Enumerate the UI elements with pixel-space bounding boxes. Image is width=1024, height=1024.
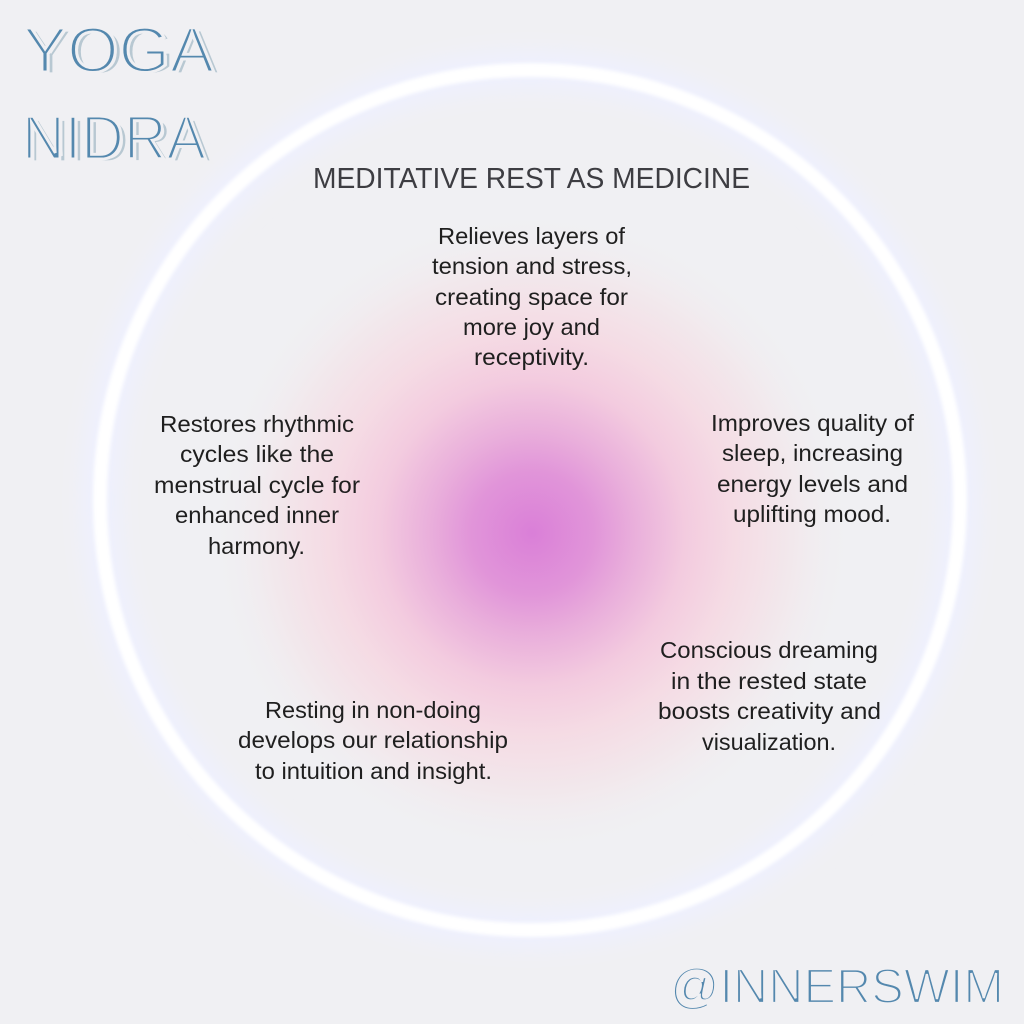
text block: tension and stress: receptivity. <box>474 344 589 370</box>
text block: quality of sleep <box>711 410 914 527</box>
title: Nidra: NIDRA <box>28 107 213 176</box>
text block: quality of sleep: uplifting mood. <box>733 501 891 527</box>
text block: tension and stress: tension and stress, <box>432 253 632 279</box>
text block: quality of sleep: Improves quality of <box>711 410 914 436</box>
text block: quality of sleep: sleep, increasing <box>722 440 903 466</box>
text block: non-doing: Resting in non-doing <box>265 697 481 723</box>
text block: conscious dreaming: Conscious dreaming <box>660 637 878 663</box>
text block: non-doing <box>238 697 508 784</box>
text block: tension and stress <box>432 223 632 370</box>
text block: quality of sleep: energy levels and <box>717 471 908 497</box>
text block: rhythmic cycles: harmony. <box>208 533 305 559</box>
text block: rhythmic cycles: enhanced inner <box>175 502 339 528</box>
text block: tension and stress: more joy and <box>463 314 600 340</box>
heading: MEDITATIVE REST AS MEDICINE <box>313 163 750 195</box>
text block: conscious dreaming <box>658 637 881 755</box>
central pink glow <box>207 208 857 858</box>
title: Yoga: YOGA <box>29 16 220 88</box>
title: Nidra: NIDRA <box>22 104 207 173</box>
text block: rhythmic cycles <box>154 411 360 559</box>
text block: rhythmic cycles: menstrual cycle for <box>154 472 360 498</box>
handle: @innerswim: @INNERSWIM <box>670 960 1004 1014</box>
text block: tension and stress: Relieves layers of <box>438 223 625 249</box>
text block: tension and stress: creating space for <box>435 284 628 310</box>
text block: rhythmic cycles: Restores rhythmic <box>160 411 354 437</box>
text block: conscious dreaming: in the rested state <box>671 668 867 694</box>
glowing ring <box>100 70 960 930</box>
text block: rhythmic cycles: cycles like the <box>180 441 334 467</box>
text block: non-doing: to intuition and insight. <box>255 758 492 784</box>
title: Yoga: YOGA <box>23 14 214 86</box>
text block: non-doing: develops our relationship <box>238 727 508 753</box>
text block: conscious dreaming: boosts creativity and <box>658 698 881 724</box>
text block: conscious dreaming: visualization. <box>702 729 836 755</box>
